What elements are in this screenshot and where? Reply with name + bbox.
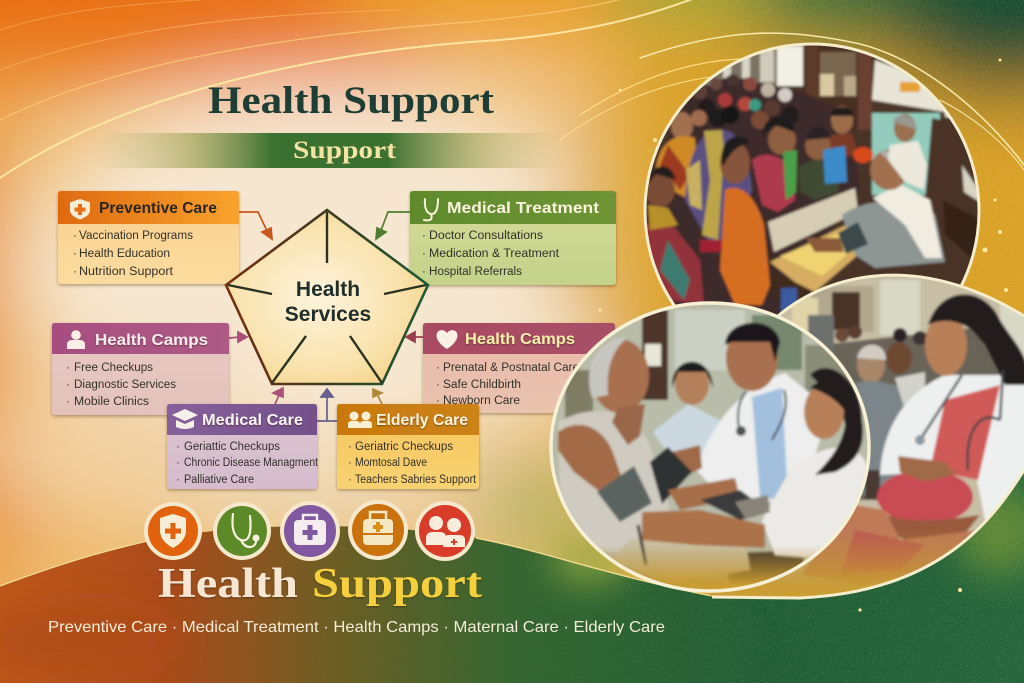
heading: Elderly Care: [376, 412, 468, 429]
central pentagon: health services: Services: [285, 303, 371, 326]
list: [348, 441, 477, 486]
list: ·: [348, 457, 352, 469]
list: Hospital Referrals: [429, 266, 522, 278]
heading: Medical Treatment: [447, 200, 600, 217]
subtitle ribbon: Support: [293, 137, 397, 164]
doctor's hand: [672, 445, 702, 478]
girl in dark dress: [798, 160, 842, 200]
list: ·: [348, 474, 352, 486]
bp monitor: [650, 447, 692, 504]
icon: person: [67, 330, 85, 349]
heading: Health Camps: [95, 332, 208, 349]
central pentagon: health services: [226, 210, 428, 384]
list: ·: [436, 362, 440, 374]
card: preventive care: [58, 191, 239, 284]
old man's vest: [558, 411, 672, 555]
list: ·: [176, 474, 180, 486]
list: ·: [176, 457, 180, 469]
cloth: [614, 538, 752, 574]
list: ·: [176, 441, 180, 453]
belly: [877, 470, 973, 524]
icon: purple medical kit: [280, 501, 340, 561]
bottom wave: [0, 470, 1024, 683]
arrow: centre up: [317, 389, 337, 421]
list: ·: [436, 395, 440, 407]
list: Free Checkups: [74, 362, 153, 374]
list: [66, 362, 176, 408]
list: Prenatal & Postnatal Care: [443, 362, 579, 374]
male doctor: [696, 373, 820, 505]
heading: Preventive Care: [99, 200, 217, 217]
door: [943, 201, 977, 257]
photo: crowded clinic queue: [644, 42, 980, 315]
female doctor's coat: [762, 448, 868, 560]
swirl lines: [0, 0, 1024, 178]
old man's head: [591, 339, 649, 413]
list: Safe Childbirth: [443, 379, 521, 391]
list: Medication & Treatment: [429, 248, 560, 260]
seated elderly man: [842, 201, 945, 268]
female doctor's hair and face: [810, 368, 863, 475]
icon: orange medical bag: [348, 500, 408, 560]
list: Doctor Consultations: [429, 230, 543, 242]
list: [436, 362, 579, 407]
arrow: medical treatment: [376, 212, 410, 239]
bench: [768, 188, 858, 252]
photo: doctors checking blood pressure: [545, 300, 875, 595]
old man's arm: [558, 425, 622, 492]
bottom icon row: [144, 500, 475, 561]
icon: stethoscope: [213, 502, 271, 560]
list: Mobile Clinics: [74, 396, 149, 408]
wall: [872, 60, 960, 120]
woman in saree: veil: [685, 130, 752, 240]
card: medical treatment: [410, 191, 616, 285]
list: Newborn Care: [443, 395, 520, 407]
list: ·: [348, 441, 352, 453]
heading: Health Camps: [465, 331, 575, 348]
cabinet: [802, 46, 807, 87]
list: [176, 441, 319, 486]
list: Geriatric Checkups: [355, 441, 453, 453]
photo: pregnant woman with stethoscope: [708, 274, 1024, 600]
lower dark cloth: [728, 550, 805, 585]
list: ·: [73, 248, 77, 260]
skirt: [800, 505, 980, 585]
lower hand: [886, 514, 980, 541]
bottom tagline: Preventive Care · Medical Treatment · Health Camps · Maternal Care · Elderly Care: [48, 619, 665, 636]
list: ·: [422, 248, 426, 260]
cuff device: [700, 490, 770, 520]
list: Chronic Disease Managment: [184, 457, 319, 469]
woman coat: [880, 375, 1024, 520]
arrow: medical care: [273, 388, 283, 404]
magenta woman: [752, 155, 795, 212]
list: ·: [422, 230, 426, 242]
head and hair: [925, 314, 967, 376]
list: ·: [66, 379, 70, 391]
icon: graduation cap: [172, 409, 198, 429]
heading: Medical Care: [202, 412, 303, 429]
bottom title: Health: [158, 561, 298, 607]
icon: preventive shield: [144, 502, 202, 560]
central pentagon: health services: Health: [296, 278, 360, 301]
icon: heart: [437, 330, 457, 349]
arrow: health camps right: [406, 332, 423, 342]
crowd mass: [646, 76, 859, 314]
upper left woman: [671, 112, 693, 140]
icon: people: [415, 501, 475, 561]
red ball: [853, 147, 873, 163]
subtitle ribbon: [95, 133, 565, 168]
corridor and poster: [700, 45, 805, 85]
list: ·: [66, 362, 70, 374]
icon: stethoscope: [424, 199, 438, 220]
arrow: health camps left: [229, 332, 247, 342]
card: elderly care: [337, 404, 479, 489]
list: ·: [66, 396, 70, 408]
list: ·: [73, 230, 77, 242]
standing man: [894, 114, 916, 142]
woman behind: [831, 106, 853, 134]
list: [422, 230, 560, 278]
bottom title: [158, 561, 482, 607]
list: Momtosal Dave: [355, 457, 427, 469]
blue bag: [823, 146, 847, 184]
connector arrows: [229, 212, 423, 421]
sparkles: [598, 58, 1008, 612]
bottom title: Support: [312, 561, 482, 607]
list: Palliative Care: [184, 474, 254, 486]
forearms: [668, 478, 740, 510]
list: Geriattic Checkups: [184, 441, 280, 453]
arrow: preventive care: [237, 212, 272, 239]
list: ·: [436, 379, 440, 391]
list: Diagnostic Services: [74, 379, 176, 391]
saree skirt: [720, 188, 770, 305]
upper hand: [898, 456, 956, 482]
icon: shield: [70, 199, 90, 220]
title: Health Support: [208, 79, 494, 122]
desk and register: [769, 224, 858, 292]
card: health camps right: [423, 323, 615, 413]
card: medical care: [167, 404, 319, 489]
list: Vaccination Programs: [79, 230, 193, 242]
nurse: [652, 403, 721, 456]
list: ·: [73, 266, 77, 278]
list: Nutrition Support: [79, 266, 174, 278]
gold sparkle dust: [524, 0, 1024, 683]
list: [73, 230, 193, 278]
front left woman: [647, 222, 706, 304]
background patients: [820, 325, 1000, 500]
list: Teachers Sabries Support: [355, 474, 477, 486]
list: ·: [422, 266, 426, 278]
icon: two people: [348, 412, 372, 428]
card: health camps left: [52, 323, 229, 415]
list: Health Education: [79, 248, 170, 260]
arrow: elderly care: [373, 389, 382, 404]
